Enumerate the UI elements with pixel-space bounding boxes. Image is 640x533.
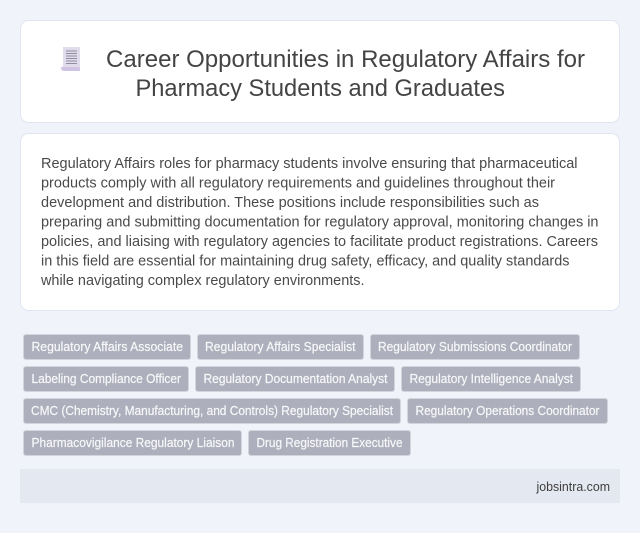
tag: Regulatory Documentation Analyst [196,366,394,392]
tag: Regulatory Affairs Associate [24,334,190,360]
tag: Regulatory Submissions Coordinator: Regulatory Submissions Coordinator [378,340,572,354]
tag: Drug Registration Executive: Drug Registration Executive [256,436,403,450]
text block: description: products comply with all regulatory requirements and guidelines throughout their [41,174,555,192]
tag: Regulatory Submissions Coordinator [370,334,580,360]
text block: description: development and distribution. These positions include responsibilities such as [41,194,539,211]
tag: Pharmacovigilance Regulatory Liaison: Pharmacovigilance Regulatory Liaison [32,436,235,450]
title: Pharmacy Students and Graduates [136,75,505,102]
title: Career Opportunities in Regulatory Affairs for [106,46,585,73]
tag: Labeling Compliance Officer [24,366,188,392]
footer text: site name: jobsintra.com [536,480,610,494]
footer [20,469,620,503]
tag: CMC Regulatory Specialist: CMC (Chemistry, Manufacturing, and Controls) Regulatory Specialist [31,404,393,418]
text block: description: preparing and submitting documentation for regulatory approval, monitoring changes in [41,214,598,230]
text block: description [40,155,599,289]
tag: Pharmacovigilance Regulatory Liaison [24,430,242,456]
icon: document scroll [61,47,80,71]
tag: Regulatory Intelligence Analyst [402,366,580,392]
tag: CMC Regulatory Specialist [24,398,400,424]
tag: Regulatory Affairs Specialist [198,334,364,360]
panel: description [20,134,620,310]
tag: Regulatory Operations Coordinator: Regulatory Operations Coordinator [416,404,600,418]
tag: Regulatory Affairs Specialist: Regulatory Affairs Specialist [205,340,356,354]
tag: Labeling Compliance Officer: Labeling Compliance Officer [32,372,181,386]
text block: description: policies, and liaising with regulatory agencies to facilitate product registrations. Careers [41,233,598,250]
tag: Regulatory Affairs Associate: Regulatory Affairs Associate [32,340,183,354]
tag list [24,334,608,456]
tag: Regulatory Intelligence Analyst: Regulatory Intelligence Analyst [410,372,574,386]
text block: description: in this field are essential for maintaining drug safety, efficacy, and quality standards [41,252,570,270]
tag: Drug Registration Executive [248,430,410,456]
panel: header [20,20,620,122]
tag: Regulatory Documentation Analyst: Regulatory Documentation Analyst [204,372,388,386]
tag: Regulatory Operations Coordinator [408,398,608,424]
text block: description: Regulatory Affairs roles for pharmacy students involve ensuring that pharmaceutical [41,155,578,172]
text block: description: while navigating complex regulatory environments. [40,272,365,289]
title [106,46,585,102]
